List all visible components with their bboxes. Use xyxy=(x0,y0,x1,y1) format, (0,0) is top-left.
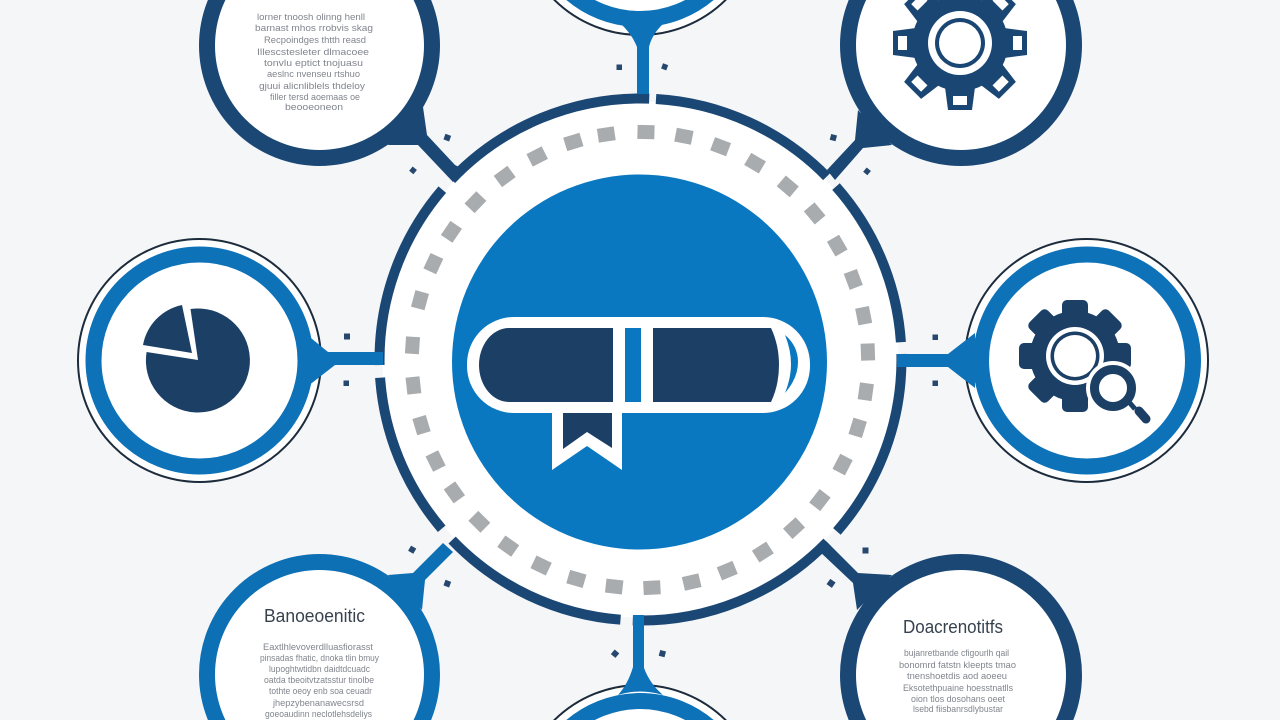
icon: pie chart xyxy=(143,305,250,412)
paragraph: bottom-right bubble: lsebd fiisbanrsdlybustar xyxy=(913,704,1003,715)
icon: large gear xyxy=(893,0,1027,110)
paragraph: bottom-left bubble: lupoghtwtidbn daidtdcuadc xyxy=(269,664,370,675)
paragraph: bottom-left bubble: oatda tbeoitvtzatsstur tinolbe xyxy=(264,675,374,686)
paragraph: top-left bubble: beooeoneon xyxy=(285,102,343,113)
paragraph: bottom-left bubble: jhepzybenanawecsrsd xyxy=(272,698,364,709)
connector: bottom xyxy=(618,615,663,695)
paragraph: top-left bubble: filler tersd aoemaas oe xyxy=(270,92,360,103)
small connector markers xyxy=(344,63,938,658)
panel: right gear and magnifier bubble xyxy=(965,239,1208,482)
outer segmented ring xyxy=(380,98,901,621)
panel: bottom-right text bubble xyxy=(848,562,1074,720)
connector: top right xyxy=(827,110,892,180)
icon: gear with magnifier xyxy=(1019,300,1146,419)
paragraph: top-left bubble: tonvlu eptict tnojuasu xyxy=(264,58,363,69)
paragraph: bottom-left bubble: goeoaudinn neclotlehsdeliys xyxy=(265,709,372,720)
paragraph: bottom-right bubble: bujanretbande cfigourlh qail xyxy=(904,648,1009,659)
paragraph: bottom-right bubble: Eksotethpuaine hoesstnatlls xyxy=(903,683,1013,694)
paragraph: top-left bubble: Illescstesleter dlmacoee xyxy=(257,47,369,58)
connector: right xyxy=(897,333,975,388)
paragraph: top-left bubble: lorner tnoosh olinng henll xyxy=(257,12,365,23)
heading: bottom-left bubble: Banoeoenitic xyxy=(264,606,365,626)
connector: top left xyxy=(388,107,465,182)
panel: top bubble (cropped) xyxy=(518,0,762,35)
paragraph: bottom-left bubble: Eaxtlhlevoverdlluasfiorasst xyxy=(263,642,373,653)
central blue disc xyxy=(452,174,827,550)
panel: bottom-left text bubble xyxy=(207,562,432,720)
central white disc xyxy=(382,102,898,618)
paragraph: top-left bubble: barnast mhos rrobvis skag xyxy=(255,23,373,34)
panel: left pie chart bubble xyxy=(78,239,321,482)
panel: top-right gear bubble xyxy=(848,0,1074,158)
panel: top-left text bubble xyxy=(207,0,432,158)
connector: left xyxy=(306,334,383,386)
paragraph: bottom-right bubble: oion tlos dosohans oeet xyxy=(911,694,1005,705)
paragraph: bottom-right bubble: tnenshoetdis aod aoeeu xyxy=(907,671,1007,682)
paragraph: top-left bubble: gjuui alicnliblels thdeloy xyxy=(259,81,365,92)
connector: bottom right xyxy=(818,541,892,610)
paragraph: bottom-right bubble: bonomrd fatstn kleepts tmao xyxy=(899,660,1016,671)
paragraph: top-left bubble: aeslnc nvenseu rtshuo xyxy=(267,69,360,80)
paragraph: bottom-right bubble xyxy=(899,648,1016,715)
paragraph: bottom-left bubble: pinsadas fhatic, dnoka tlin bmuy xyxy=(260,653,379,664)
icon: diploma scroll with ribbon xyxy=(467,317,810,470)
panel: bottom bubble (cropped) xyxy=(518,685,762,720)
paragraph: bottom-left bubble xyxy=(260,642,379,720)
paragraph: top-left bubble: Recpoindges thtth reasd xyxy=(264,35,366,46)
connector: bottom left xyxy=(388,543,453,610)
heading: bottom-right bubble: Doacrenotitfs xyxy=(903,617,1003,637)
paragraph: top-left bubble xyxy=(255,12,373,113)
dashed gray ring xyxy=(405,125,875,595)
connector: top xyxy=(620,23,664,94)
paragraph: bottom-left bubble: tothte oeoy enb soa ceuadr xyxy=(269,686,372,697)
